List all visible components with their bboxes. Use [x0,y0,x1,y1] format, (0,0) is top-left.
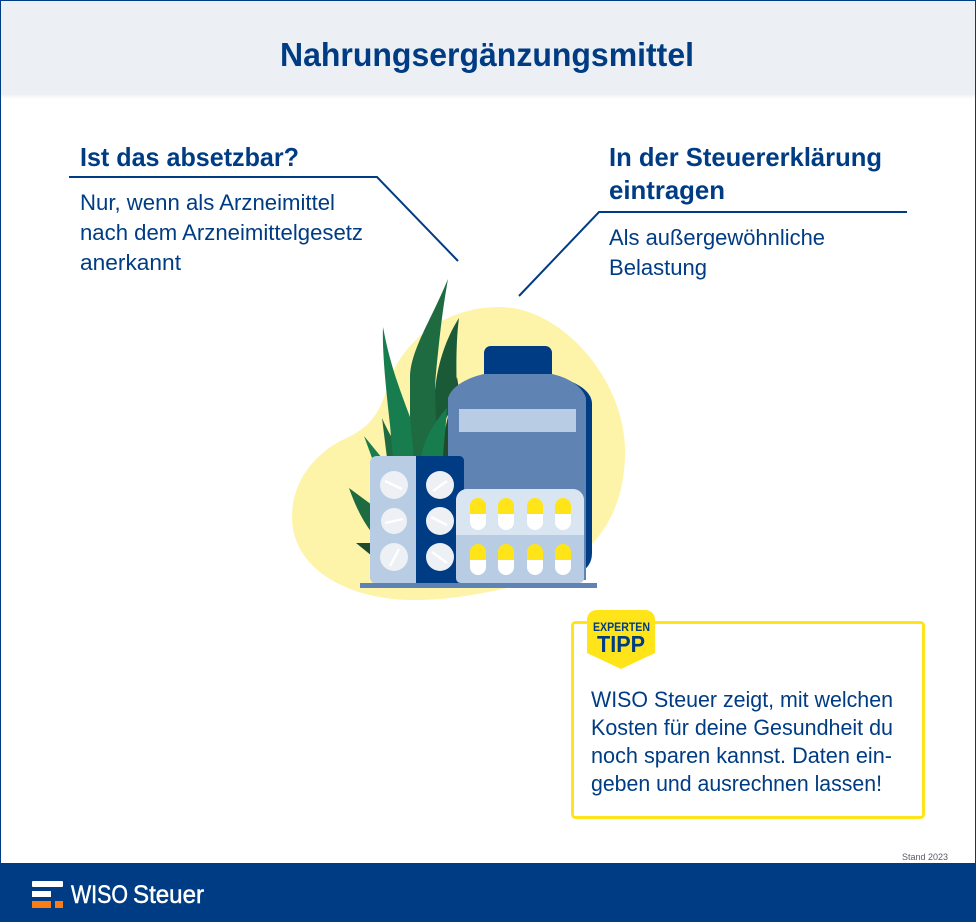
plant leaves [349,279,470,556]
callout body left: nach dem Arzneimittelgesetz [80,220,363,245]
tip box outline [572,622,924,818]
callout body left: Nur, wenn als Arzneimittel [80,190,335,215]
tip text: Kosten für deine Gesundheit du [591,715,893,740]
callout: In der Steuererklärung eintragen [519,142,907,296]
tip text: WISO Steuer zeigt, mit welchen [591,687,893,712]
tip text: noch sparen kannst. Daten ein- [591,743,892,768]
illustration: medicine and plant [292,279,625,600]
right blister pack with capsules [456,489,584,583]
callout body right: Als außergewöhnliche [609,225,825,250]
callout heading left: Ist das absetzbar? [80,142,299,172]
callout heading right: In der Steuererklärung [609,142,882,172]
left blister pack [370,456,464,584]
callout body left: anerkannt [80,250,182,275]
logo wordmark: Steuer [133,881,204,909]
expert tip panel [572,610,924,818]
callout heading right: eintragen [609,175,725,205]
expert tip badge: EXPERTEN [593,620,650,634]
date note: Stand 2023 [902,852,948,863]
callout: Ist das absetzbar [69,142,458,275]
title: Nahrungsergänzungsmittel [280,36,694,73]
yellow blob background [292,307,625,600]
expert tip badge [587,610,655,669]
shelf [360,583,597,588]
callout leader line left [69,177,458,261]
callout leader line right [519,212,907,296]
bottle [448,346,592,580]
logo mark [32,881,63,908]
callout body right: Belastung [609,255,707,280]
tip text: geben und ausrechnen lassen! [591,771,882,796]
expert tip badge: TIPP [597,631,645,657]
header band [1,1,975,95]
footer band [0,863,976,922]
logo wordmark: WISO [71,881,128,909]
